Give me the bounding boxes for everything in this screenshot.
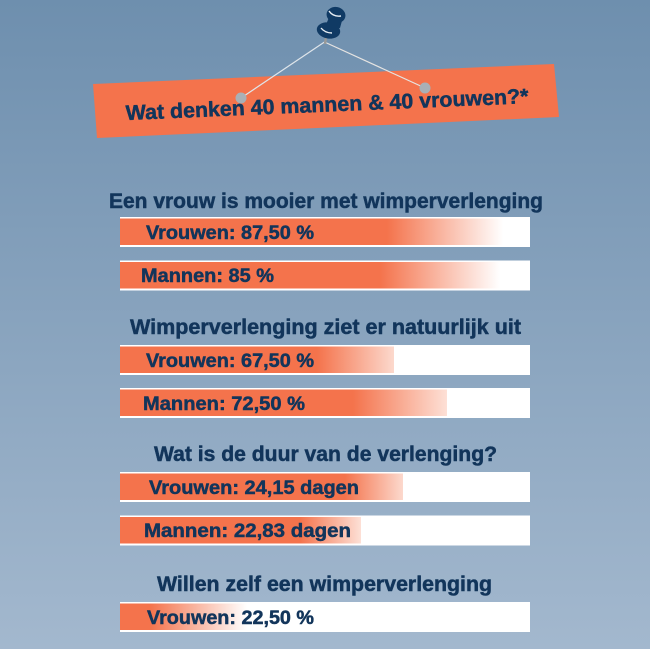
section: ziet er natuurlijk uit: [120, 316, 530, 418]
icon: push pin with strings: [236, 5, 430, 103]
bar: vrouwen 24,15 dagen: Vrouwen: 24,15 dagen: [149, 477, 359, 499]
bar: vrouwen 67,50: Vrouwen: 67,50 %: [146, 350, 314, 372]
heading: Een vrouw is mooier met wimperverlenging: [109, 190, 543, 213]
heading: Wimperverlenging ziet er natuurlijk uit: [130, 316, 521, 339]
bar: vrouwen 24,15 dagen: [120, 472, 530, 502]
section: mooier met wimperverlenging: [109, 190, 543, 290]
bar: mannen 85: Mannen: 85 %: [141, 265, 274, 287]
bar: vrouwen 67,50: [120, 345, 530, 375]
bar: mannen 72,50: Mannen: 72,50 %: [143, 393, 305, 415]
bar: vrouwen 87,50: [120, 217, 530, 247]
banner title: Wat denken 40 mannen & 40 vrouwen?*: [125, 85, 530, 125]
bar: mannen 85: [120, 260, 530, 290]
title banner: [93, 64, 559, 138]
heading: Willen zelf een wimperverlenging: [157, 573, 492, 596]
bar: mannen 22,83 dagen: [120, 516, 530, 546]
bar: vrouwen 22,50: [120, 602, 530, 632]
bar: mannen 72,50: [120, 388, 530, 418]
heading: Wat is de duur van de verlenging?: [154, 443, 497, 466]
section: duur van de verlenging: [120, 443, 530, 546]
section: willen zelf: [120, 573, 530, 632]
bar: vrouwen 22,50: Vrouwen: 22,50 %: [147, 607, 314, 629]
bar: mannen 22,83 dagen: Mannen: 22,83 dagen: [144, 520, 351, 542]
bar: vrouwen 87,50: Vrouwen: 87,50 %: [146, 222, 314, 244]
